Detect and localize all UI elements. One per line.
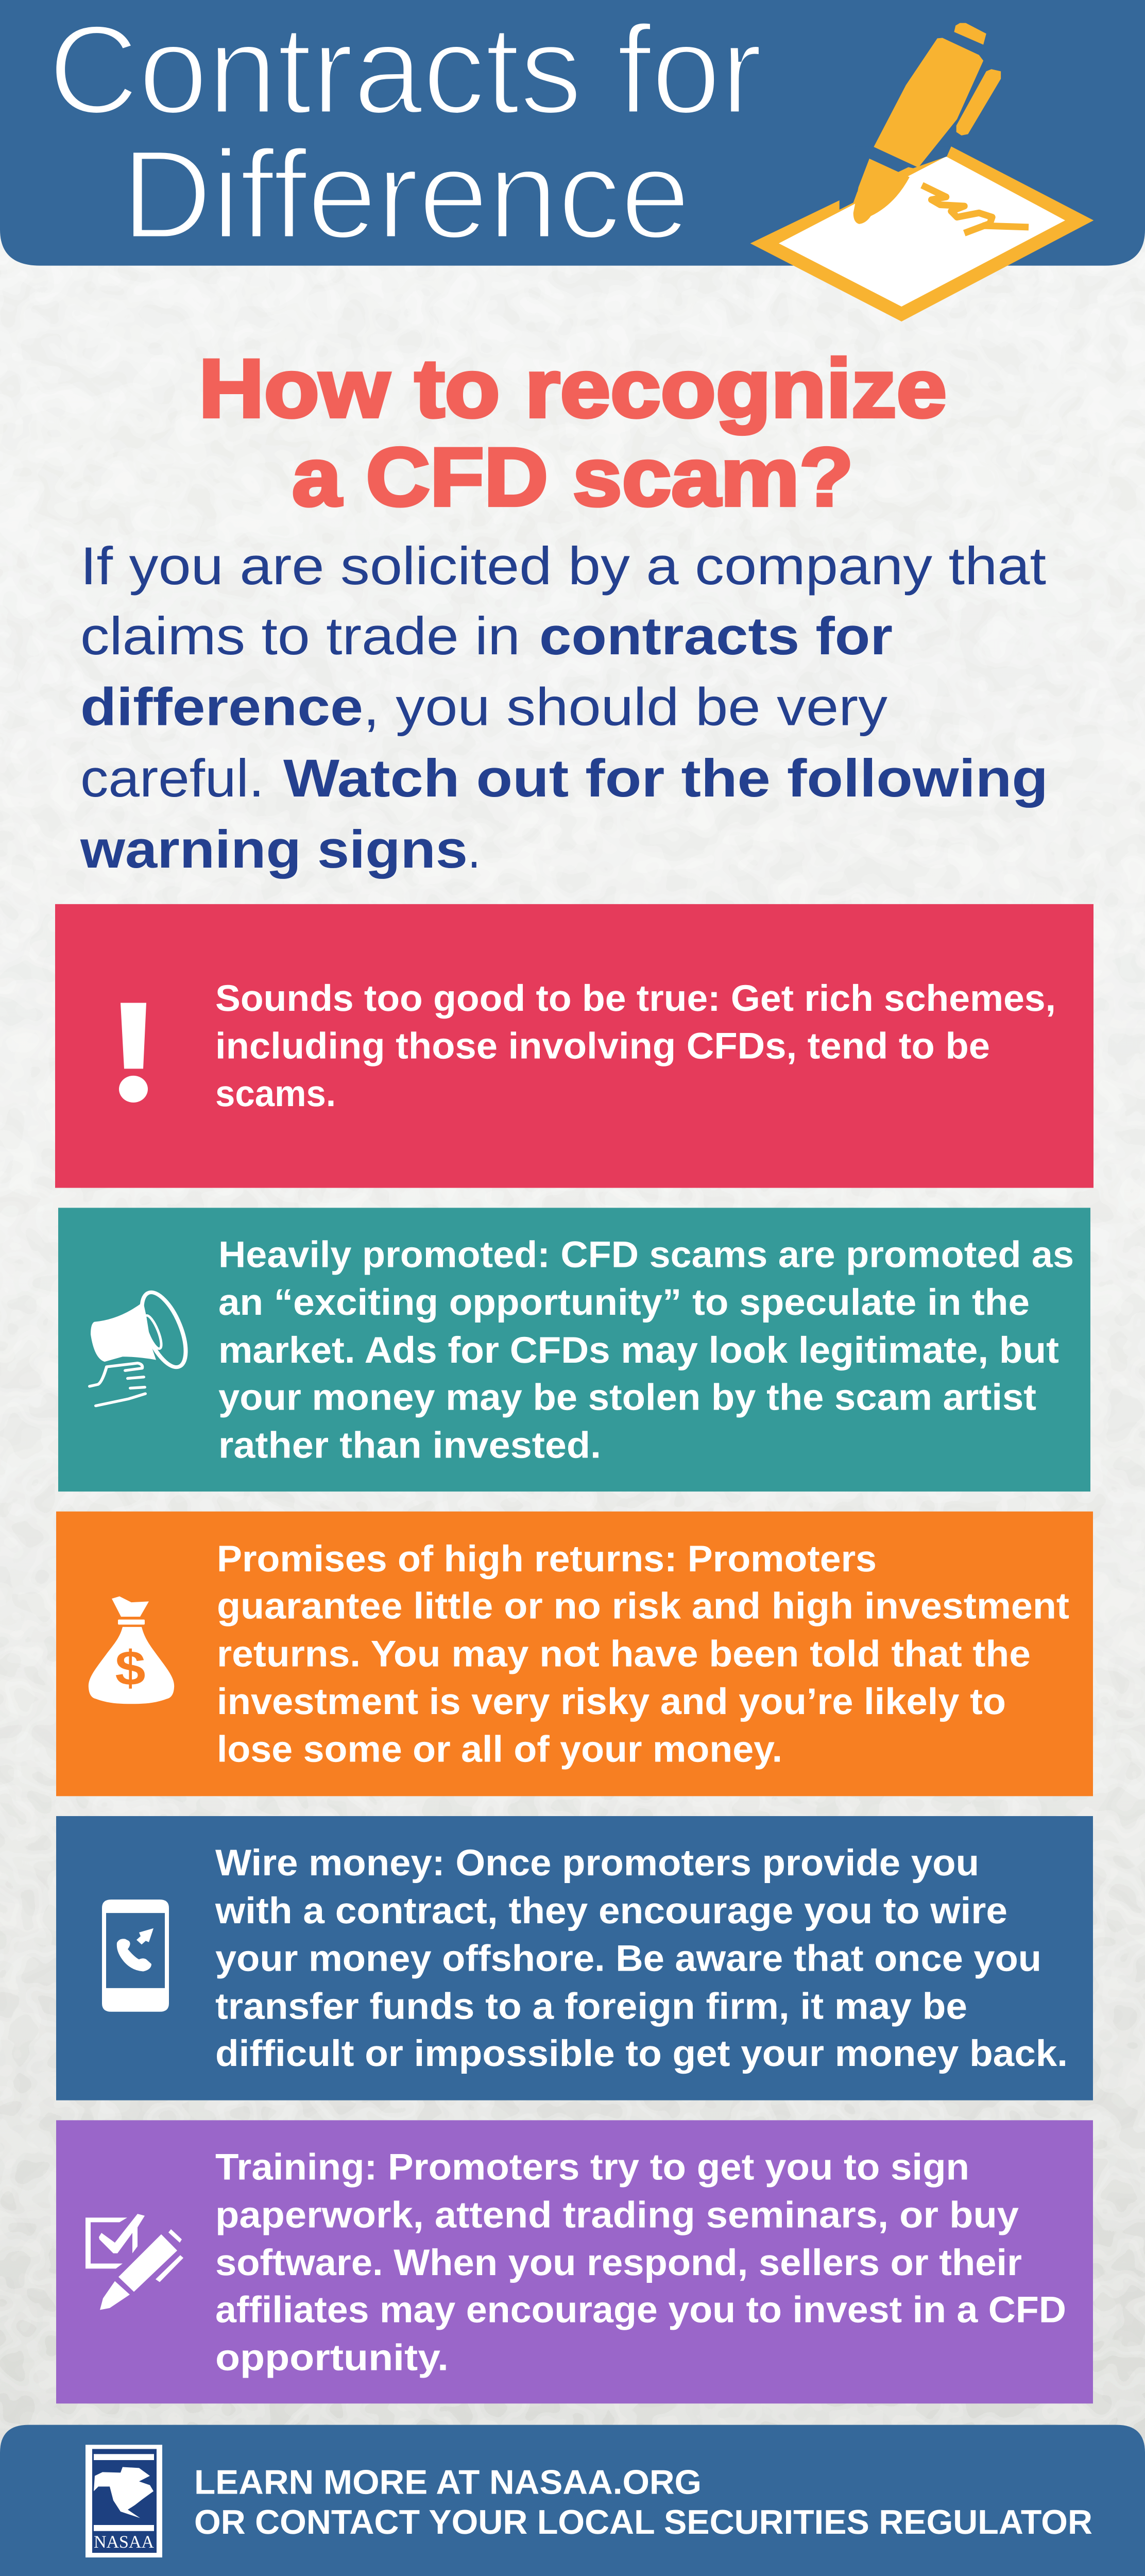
panel text: paperwork, attend trading seminars, or buy: [215, 2194, 1019, 2235]
panel: heavily promoted: [58, 1208, 1090, 1492]
title: Difference: [122, 124, 690, 265]
NASAA logo: NASAA: [94, 2532, 154, 2552]
panel text: investment is very risky and you’re likely to: [217, 1681, 1006, 1722]
title: Contracts for: [48, 0, 762, 140]
panel text: your money may be stolen by the scam artist: [218, 1377, 1036, 1418]
panel text: [215, 1842, 1068, 2074]
heading: How to recognize: [199, 342, 947, 434]
icon: phone with outgoing call: [102, 1900, 169, 2012]
panel: training: [56, 2120, 1093, 2403]
panel text: guarantee little or no risk and high investment: [217, 1585, 1069, 1626]
panel: promises of high returns: [56, 1512, 1093, 1796]
footer banner: [0, 2425, 1145, 2576]
panel text: lose some or all of your money.: [217, 1728, 782, 1770]
heading: a CFD scam?: [292, 431, 853, 523]
footer call to action: LEARN MORE AT NASAA.ORG: [194, 2463, 702, 2501]
panel text: Training: Promoters try to get you to sign: [215, 2146, 969, 2188]
panel text: rather than invested.: [218, 1425, 601, 1466]
NASAA logo: [86, 2445, 162, 2557]
icon: money bag: [89, 1596, 174, 1704]
panel text: Sounds too good to be true: Get rich schemes,: [215, 977, 1056, 1019]
icon: money bag: $: [115, 1641, 145, 1696]
footer call to action: [194, 2463, 1092, 2541]
intro paragraph: If you are solicited by a company that: [80, 536, 1046, 596]
panel text: market. Ads for CFDs may look legitimate, but: [218, 1329, 1059, 1370]
heading: [199, 342, 947, 523]
panel text: [218, 1234, 1074, 1466]
panel: wire money: [56, 1816, 1093, 2100]
panel text: Promises of high returns: Promoters: [217, 1538, 877, 1579]
panel text: opportunity.: [215, 2337, 449, 2378]
panel text: Heavily promoted: CFD scams are promoted as: [218, 1234, 1074, 1275]
intro paragraph: , you should be very: [363, 677, 887, 737]
panel text: an “exciting opportunity” to speculate in the: [218, 1281, 1030, 1323]
panel text: affiliates may encourage you to invest in a CFD: [215, 2289, 1066, 2330]
title: [48, 0, 762, 265]
panel text: difficult or impossible to get your money back.: [215, 2032, 1068, 2074]
intro paragraph: contracts for: [539, 606, 893, 666]
panel text: returns. You may not have been told that the: [217, 1633, 1031, 1674]
intro paragraph: difference: [80, 677, 363, 737]
panel text: software. When you respond, sellers or their: [215, 2242, 1022, 2283]
intro paragraph: claims to trade in: [80, 606, 520, 666]
panel text: your money offshore. Be aware that once you: [215, 1938, 1041, 1979]
panel text: [217, 1538, 1069, 1770]
icon: exclamation mark: [119, 1003, 148, 1103]
panel text: [215, 977, 1056, 1114]
intro paragraph: warning signs: [80, 820, 468, 879]
intro paragraph: careful.: [80, 749, 264, 808]
panel text: [215, 2146, 1066, 2378]
icon: megaphone in hand: [90, 1287, 195, 1406]
panel text: with a contract, they encourage you to wire: [215, 1890, 1007, 1931]
panel text: transfer funds to a foreign firm, it may be: [215, 1985, 967, 2027]
intro paragraph: Watch out for the following: [283, 749, 1048, 808]
icon: pen signing a contract: [750, 23, 1093, 321]
panel text: including those involving CFDs, tend to be: [215, 1025, 990, 1066]
icon: checkbox and pen: [86, 2214, 183, 2310]
intro paragraph: .: [468, 820, 481, 879]
header banner: [0, 0, 1145, 321]
intro paragraph: [80, 536, 1048, 879]
panel: sounds too good to be true: [55, 904, 1093, 1188]
panel text: scams.: [215, 1073, 336, 1114]
panel text: Wire money: Once promoters provide you: [215, 1842, 979, 1884]
